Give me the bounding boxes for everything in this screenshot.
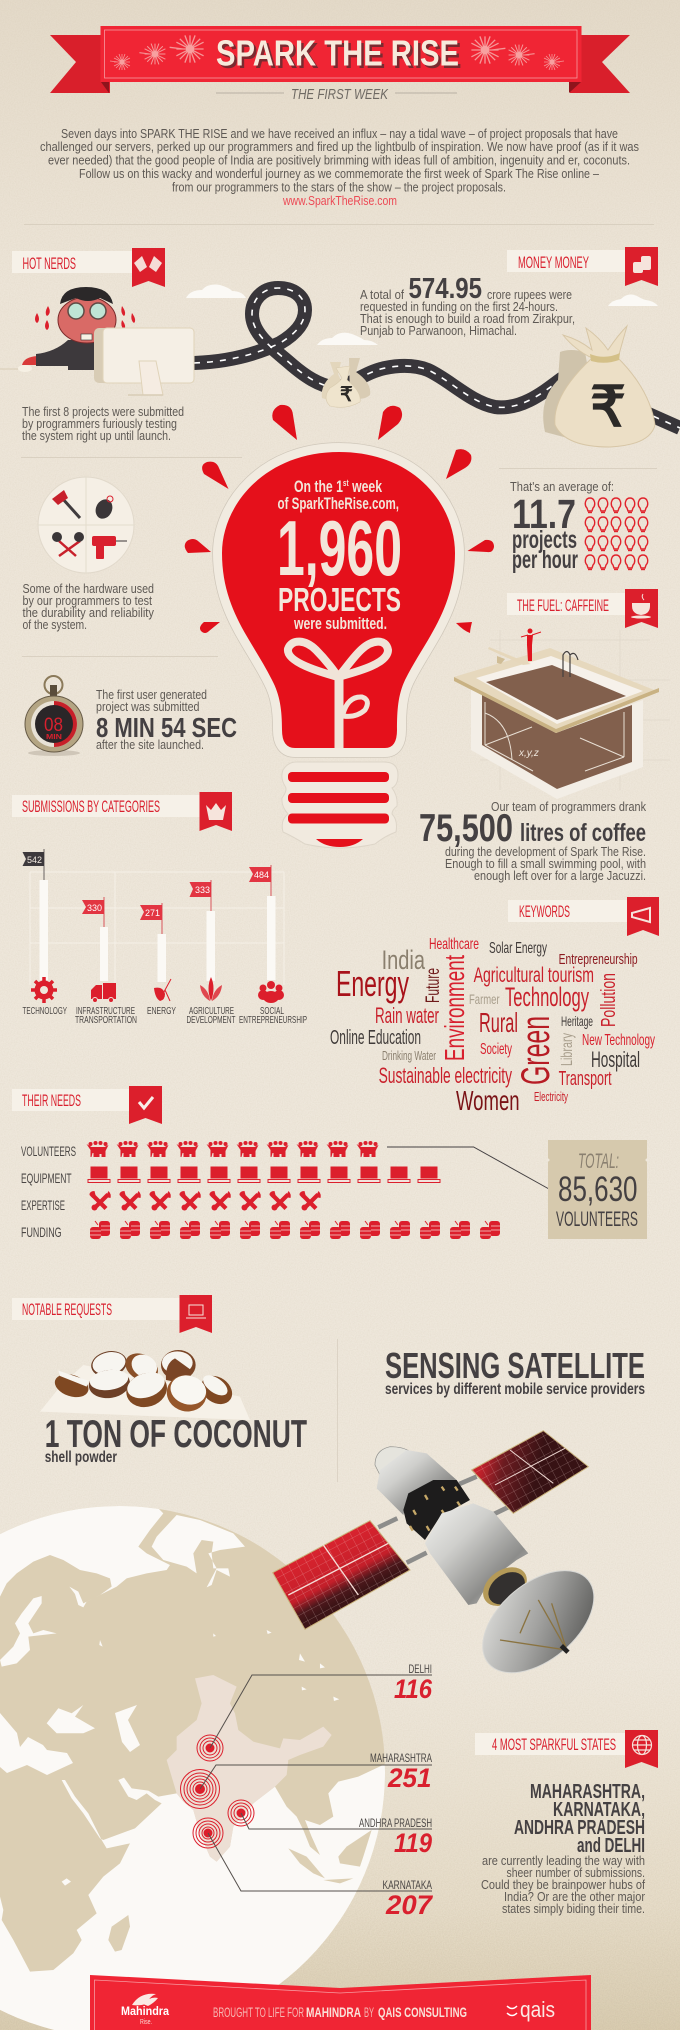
pictogram: expertise row xyxy=(21,1191,321,1213)
madagascar xyxy=(108,1915,130,1952)
word cloud: keywords: Entrepreneurship xyxy=(559,951,638,968)
text: sparkful states: sheer number of submissions. xyxy=(506,1866,645,1880)
icon: people xyxy=(258,981,284,1003)
text: hot nerds: by programmers furiously testing xyxy=(22,417,177,431)
text: coffee: enough left over for a large Jacuzzi. xyxy=(474,869,646,883)
label: karnataka: 207 xyxy=(385,1890,434,1920)
axis labels: DEVELOPMENT xyxy=(186,1014,236,1026)
section: notable requests header xyxy=(12,1295,212,1333)
axis labels xyxy=(22,1005,307,1026)
bulb headline: were submitted. xyxy=(293,614,387,633)
bulb headline: of SparkTheRise.com, xyxy=(278,494,399,513)
grain on lower page xyxy=(0,1800,680,2030)
callout: total volunteers xyxy=(546,1140,648,1239)
icon array: bulbs xyxy=(585,498,648,570)
text: funding total xyxy=(360,273,575,338)
label: maharashtra: MAHARASHTRA xyxy=(370,1751,432,1765)
marker: karnataka xyxy=(193,1818,223,1848)
word cloud: keywords: Library xyxy=(559,1033,576,1066)
logo: mahindra: Rise. xyxy=(140,2019,152,2026)
callout connector xyxy=(387,1147,549,1189)
icon: wheat xyxy=(200,977,222,1001)
word cloud: keywords: Society xyxy=(480,1041,512,1058)
satellite body xyxy=(375,1447,534,1614)
word cloud: keywords: Healthcare xyxy=(429,936,479,953)
icon: wind leaf xyxy=(154,979,171,1001)
text: hot nerds: the system right up until launch. xyxy=(22,429,171,443)
text: first project: after the site launched. xyxy=(96,738,204,752)
label: delhi: 116 xyxy=(394,1674,433,1704)
text: first project: project was submitted xyxy=(96,700,200,714)
icon: gear xyxy=(31,977,57,1003)
word cloud: keywords: Electricity xyxy=(534,1089,568,1104)
map labels xyxy=(359,1662,434,1920)
text: sparkful states xyxy=(481,1781,645,1916)
label: karnataka: KARNATAKA xyxy=(382,1878,432,1892)
callout: total volunteers: 85,630 xyxy=(558,1170,638,1209)
illustration: programmer at computer xyxy=(0,287,194,395)
credit line: BY xyxy=(364,2004,374,2020)
lightbulb xyxy=(222,452,455,848)
map markers xyxy=(180,1735,254,1848)
word cloud: keywords: Women xyxy=(456,1085,520,1116)
marker: delhi xyxy=(197,1735,223,1761)
word cloud: keywords: Farmer xyxy=(469,991,500,1007)
lightbulb rays xyxy=(185,405,494,633)
section: hot nerds header xyxy=(12,248,165,287)
text: projects per hour xyxy=(510,480,614,574)
java xyxy=(323,1878,353,1883)
globe map xyxy=(0,1483,433,2030)
road xyxy=(194,288,680,428)
section: money money header xyxy=(507,247,658,286)
axis labels: INFRASTRUCTURE xyxy=(76,1005,135,1017)
section: keywords header: KEYWORDS xyxy=(519,903,570,921)
text: coffee: Enough to fill a small swimming pool, with xyxy=(445,857,646,871)
logo: qais: qais xyxy=(520,1997,555,2022)
bar: infrastructure 330: 330 xyxy=(87,903,102,914)
section: their needs header xyxy=(12,1086,162,1124)
text: coconut: 1 TON OF COCONUT xyxy=(45,1413,307,1456)
word cloud: keywords: Heritage xyxy=(561,1013,593,1029)
pictogram: expertise row: EXPERTISE xyxy=(21,1197,65,1213)
text: funding total: That is enough to build a road from Zirakpur, xyxy=(360,312,575,326)
bulb headline: PROJECTS xyxy=(278,581,401,618)
satellite dish xyxy=(464,1551,613,1693)
axis labels: ENERGY xyxy=(147,1005,176,1017)
pictogram: funding row: FUNDING xyxy=(21,1224,62,1240)
subtitle: THE FIRST WEEK xyxy=(291,86,389,103)
bar: social 484: 484 xyxy=(254,870,269,881)
word cloud: keywords: Rural xyxy=(479,1007,518,1038)
text: hardware: the durability and reliability xyxy=(22,606,155,620)
title: SPARK THE RISE xyxy=(216,32,459,74)
word cloud: keywords: Drinking Water xyxy=(382,1048,436,1063)
pictogram: volunteers row xyxy=(21,1141,378,1159)
text: first project xyxy=(96,688,237,752)
text: funding total: 574.95 xyxy=(408,273,482,305)
text: sparkful states: and DELHI xyxy=(577,1835,645,1857)
leader lines xyxy=(200,1675,432,1891)
credit line xyxy=(213,2004,467,2020)
text: hardware: Some of the hardware used xyxy=(22,582,154,596)
solar panel: lower xyxy=(273,1521,410,1629)
illustration: coconuts xyxy=(40,1348,250,1420)
label: andhra pradesh xyxy=(359,1816,432,1858)
text: coffee xyxy=(419,800,647,883)
section: keywords header xyxy=(508,897,659,936)
northern oceans xyxy=(0,1483,339,1733)
text: first project: The first user generated xyxy=(96,688,207,702)
label: andhra pradesh: 119 xyxy=(394,1828,432,1858)
text: projects per hour: That's an average of: xyxy=(510,480,614,494)
bulb headline: 1,960 xyxy=(277,504,402,592)
icon: small money bags: ₹ xyxy=(340,384,353,406)
section: submissions by categories header: SUBMISSIONS BY CATEGORIES xyxy=(22,798,160,816)
icon: coffee cup xyxy=(631,594,651,618)
text: coffee: 75,500 xyxy=(419,807,513,850)
text: projects per hour: projects xyxy=(512,526,577,554)
label: andhra pradesh: ANDHRA PRADESH xyxy=(359,1816,432,1830)
word cloud: keywords: Sustainable electricity xyxy=(379,1063,512,1088)
borneo xyxy=(338,1830,372,1867)
section: notable requests header: NOTABLE REQUESTS xyxy=(22,1301,112,1319)
intro text: from our programmers to the stars of the show – the project proposals. xyxy=(172,180,506,194)
word cloud: keywords: Hospital xyxy=(591,1047,640,1072)
word cloud: keywords: Technology xyxy=(505,982,589,1012)
title: SPARK THE RISE xyxy=(218,35,462,76)
word cloud: keywords: India xyxy=(382,945,426,975)
pool ladder xyxy=(563,652,578,677)
pictogram: equipment row: EQUIPMENT xyxy=(21,1170,72,1186)
section: money money header: MONEY MONEY xyxy=(518,254,589,272)
icon: check mark xyxy=(139,1097,153,1108)
islands xyxy=(108,1830,372,1952)
word cloud: keywords: Green xyxy=(514,1016,558,1085)
icon: stopwatch: 08 xyxy=(44,715,63,736)
text: sparkful states: KARNATAKA, xyxy=(553,1799,645,1821)
word cloud: keywords: Pollution xyxy=(598,973,620,1027)
text: coffee: during the development of Spark The Rise. xyxy=(445,845,646,859)
clouds xyxy=(186,285,658,345)
section: the fuel header xyxy=(507,589,658,628)
axis labels: SOCIAL xyxy=(260,1005,284,1017)
pictogram: equipment row xyxy=(21,1167,440,1186)
icon: grenade xyxy=(93,496,115,521)
text: hardware: by our programmers to test xyxy=(22,594,152,608)
illustration: coffee pool xyxy=(454,628,670,799)
bar: energy 271: 271 xyxy=(145,908,160,919)
icon: stopwatch: MIN xyxy=(46,734,62,741)
credit line: BROUGHT TO LIFE FOR xyxy=(213,2004,304,2020)
text: funding total: requested in funding on the first 24-hours. xyxy=(360,300,558,314)
pictogram: funding row xyxy=(21,1221,500,1240)
logo: qais xyxy=(507,1997,555,2022)
text: sparkful states: India? Or are the other major xyxy=(504,1890,645,1904)
bulb headline: week xyxy=(349,477,382,496)
mediterranean xyxy=(0,1713,73,1775)
caspian sea xyxy=(115,1705,140,1752)
credit line: QAIS CONSULTING xyxy=(378,2004,467,2020)
intro text: www.SparkTheRise.com xyxy=(282,194,397,208)
text: hot nerds: The first 8 projects were submitted xyxy=(22,405,184,419)
icon: crown xyxy=(206,803,226,820)
bulb screw base xyxy=(282,762,398,848)
section: sparkful states header xyxy=(475,1730,658,1768)
text: hot nerds xyxy=(22,405,184,443)
text: sparkful states: states simply biding their time. xyxy=(502,1902,645,1916)
text: sparkful states: Could they be brainpower hubs of xyxy=(481,1878,645,1892)
axis labels: TECHNOLOGY xyxy=(22,1005,67,1017)
word cloud: keywords: Online Education xyxy=(330,1027,421,1049)
bulb headline: st xyxy=(343,478,349,488)
bar: infrastructure 330 xyxy=(82,897,108,981)
arrows in the pool xyxy=(485,702,624,771)
small island xyxy=(62,1878,71,1886)
panel: tools circle xyxy=(38,477,134,573)
bar: energy 271 xyxy=(140,903,166,982)
label: maharashtra xyxy=(370,1751,432,1793)
word cloud: keywords: Agricultural tourism xyxy=(474,964,594,987)
word cloud: keywords: Rain water xyxy=(375,1003,439,1028)
diving board xyxy=(488,647,531,665)
text: funding total: A total of xyxy=(360,288,404,302)
word cloud: keywords: Future xyxy=(423,968,444,1003)
solar panel: upper xyxy=(472,1431,588,1513)
text: projects per hour: 11.7 xyxy=(512,491,576,537)
word cloud: keywords: Energy xyxy=(336,963,409,1004)
text: first project: 8 MIN 54 SEC xyxy=(96,712,237,743)
label: delhi: DELHI xyxy=(408,1662,432,1676)
section: submissions by categories header xyxy=(12,792,232,831)
icon: hammer xyxy=(52,490,80,518)
icon: truck xyxy=(91,983,116,1002)
text: funding total: Punjab to Parwanoon, Himachal. xyxy=(360,324,517,338)
icon: diver figure xyxy=(521,628,541,661)
bar: technology 542: 542 xyxy=(27,855,42,866)
bar: agriculture 333 xyxy=(190,880,215,981)
support struts xyxy=(378,1477,509,1563)
word cloud: keywords: Transport xyxy=(559,1068,612,1090)
bulb headline xyxy=(277,477,402,633)
text: projects per hour: per hour xyxy=(512,546,578,574)
section: their needs header: THEIR NEEDS xyxy=(22,1092,81,1110)
pictogram: volunteers row: VOLUNTEERS xyxy=(21,1143,76,1159)
bulb ribbon bow xyxy=(288,642,388,748)
word cloud: keywords: Environment xyxy=(439,955,470,1061)
title banner xyxy=(50,26,630,93)
icon: stopwatch xyxy=(25,676,83,756)
india xyxy=(167,1675,332,1862)
credit line: MAHINDRA xyxy=(306,2004,361,2020)
callout: total volunteers: TOTAL: xyxy=(578,1150,619,1173)
axis labels: TRANSPORTATION xyxy=(75,1014,137,1026)
text: coffee: Our team of programmers drank xyxy=(491,800,647,814)
illustration: coffee pool: x,y,z xyxy=(518,748,539,759)
illustration: satellite xyxy=(273,1431,613,1693)
icon: megaphone xyxy=(632,908,650,922)
icon: laptop xyxy=(186,1305,206,1318)
marker: andhra pradesh xyxy=(228,1800,254,1826)
icon: racing flags xyxy=(134,256,162,272)
label: maharashtra: 251 xyxy=(387,1763,432,1793)
bar chart: categories xyxy=(22,849,307,1026)
logo: mahindra xyxy=(121,1994,169,2026)
intro text xyxy=(40,127,639,208)
icon: big money bag xyxy=(543,326,655,447)
intro text: Follow us on this wacky and wonderful journey as we commemorate the first week of Spark The Rise online – xyxy=(79,167,599,181)
label: karnataka xyxy=(382,1878,434,1920)
icon: small money bags xyxy=(322,358,370,407)
section: hot nerds header: HOT NERDS xyxy=(22,255,76,273)
text: coconut xyxy=(45,1413,307,1466)
icon: drill xyxy=(92,536,127,559)
bar: agriculture 333: 333 xyxy=(195,885,210,896)
logo: mahindra: Mahindra xyxy=(121,2004,169,2018)
sumatra xyxy=(288,1848,325,1878)
label: delhi xyxy=(394,1662,433,1704)
word cloud: keywords xyxy=(330,936,655,1116)
icon: globe xyxy=(632,1736,652,1754)
bar: technology 542 xyxy=(22,849,48,980)
axis labels: AGRICULTURE xyxy=(189,1005,234,1017)
icon: coin stacks xyxy=(633,256,651,273)
text: coconut: shell powder xyxy=(45,1449,117,1466)
text: sparkful states: are currently leading the way with xyxy=(482,1854,645,1868)
text: hardware: of the system. xyxy=(22,618,87,632)
text: funding total: crore rupees were xyxy=(487,288,572,302)
marker: maharashtra xyxy=(180,1770,220,1808)
bulb headline: On the 1 xyxy=(294,477,362,496)
bar: social 484 xyxy=(249,865,276,980)
indian ocean xyxy=(0,1764,385,2030)
word cloud: keywords: Solar Energy xyxy=(489,940,547,957)
text: hardware xyxy=(22,582,155,632)
axis labels: ENTREPRENEURSHIP xyxy=(239,1014,307,1026)
icon: crossed maces xyxy=(52,532,84,556)
footer ribbon xyxy=(90,1975,591,2030)
icon: big money bag: ₹ xyxy=(590,375,626,438)
